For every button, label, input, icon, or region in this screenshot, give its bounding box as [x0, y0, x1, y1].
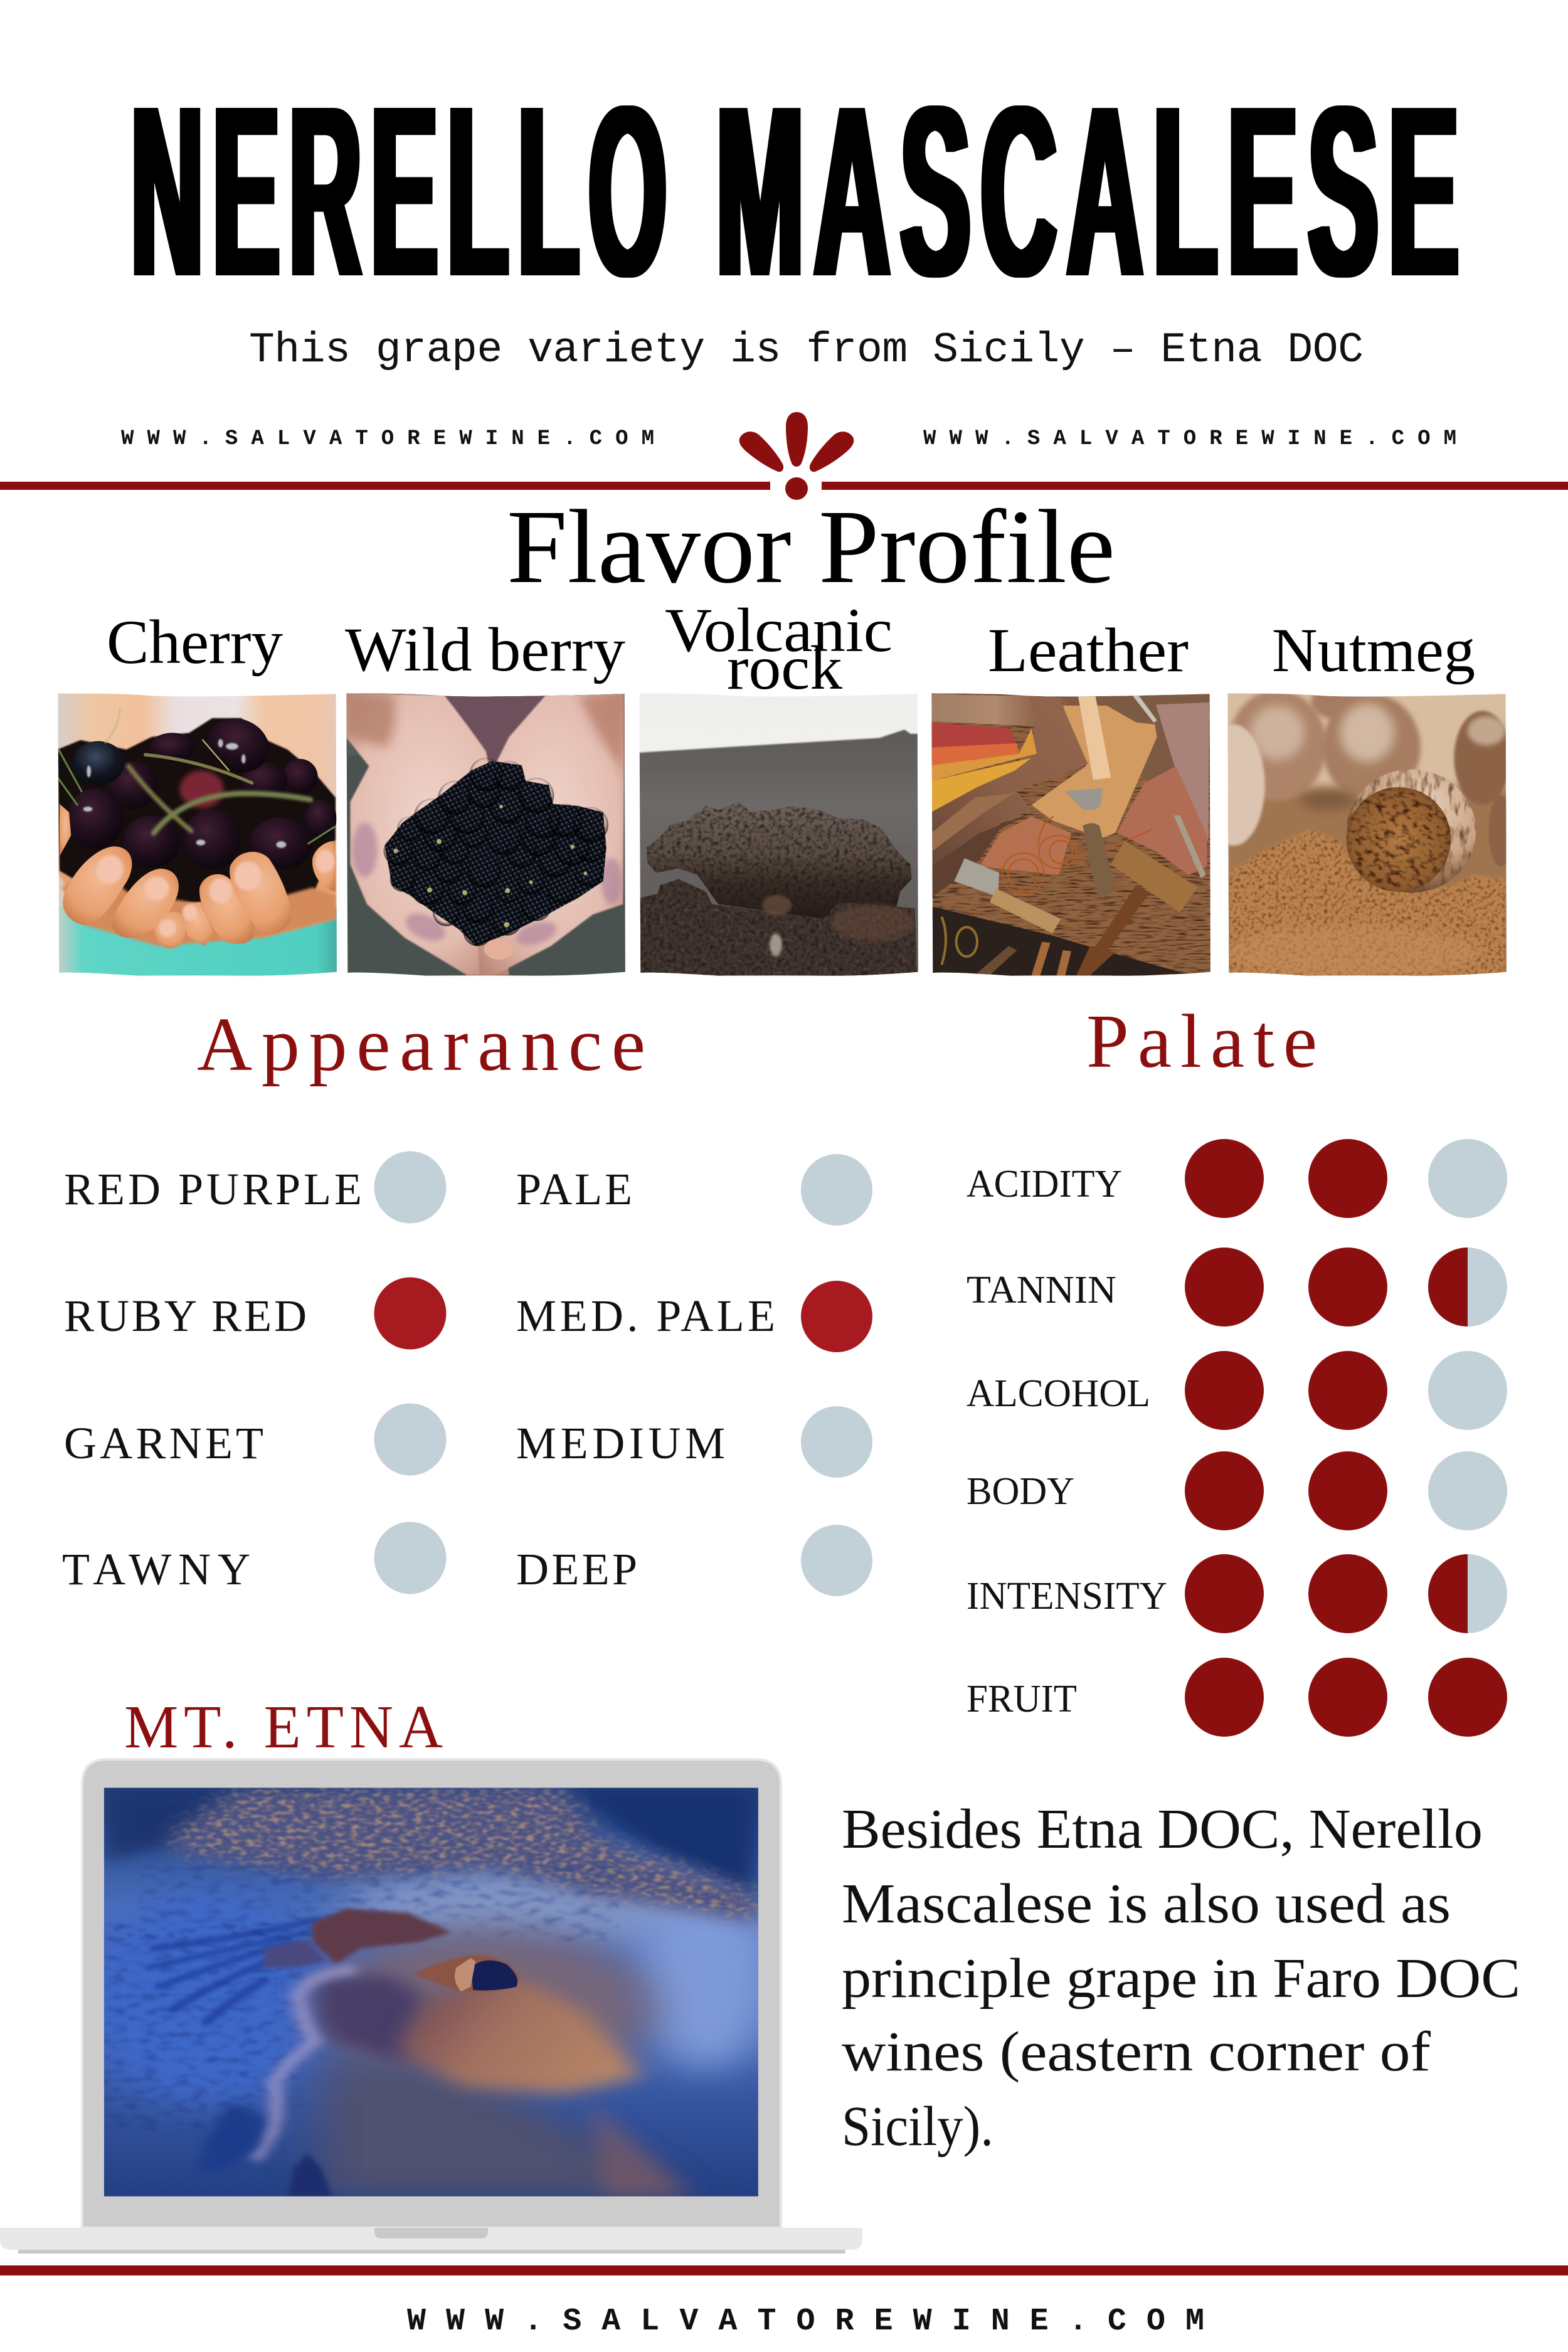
title: MASCALESE	[716, 55, 1469, 327]
flavor label: volcanic rock: Volcanic	[665, 595, 893, 665]
row: garnet: GARNET	[64, 1418, 263, 1468]
row: fruit	[967, 1658, 1507, 1737]
row: deep	[516, 1525, 872, 1596]
laptop with etna photo	[0, 1759, 862, 2254]
flavor label: nutmeg: Nutmeg	[1272, 615, 1475, 685]
body paragraph: Sicily).	[842, 2095, 993, 2158]
top divider with flower ornament	[0, 412, 1568, 500]
photo: blackberries in hands	[342, 687, 635, 980]
heading: appearance: Appearance	[197, 1002, 645, 1087]
row: ruby red	[64, 1277, 447, 1350]
website url right: WWW.SALVATOREWINE.COM	[923, 427, 1456, 451]
appearance hue column	[62, 1152, 447, 1594]
row: tawny: TAWNY	[62, 1544, 250, 1594]
photo: mount etna from above	[82, 1788, 778, 2196]
body paragraph: Mascalese is also used as	[842, 1873, 1451, 1935]
laptop body	[82, 1759, 781, 2228]
row: intensity: INTENSITY	[967, 1575, 1167, 1618]
title: NERELLO	[131, 55, 676, 327]
heading: flavor profile: Flavor Profile	[507, 489, 1115, 605]
flavor label: volcanic rock	[665, 595, 893, 702]
row: body	[967, 1451, 1507, 1530]
row: medium pale: MED. PALE	[516, 1291, 775, 1341]
row: pale: PALE	[516, 1164, 632, 1214]
heading: palate: Palate	[1086, 999, 1317, 1084]
body paragraph: wines (eastern corner of	[842, 2021, 1431, 2083]
row: medium: MEDIUM	[516, 1418, 725, 1468]
row: acidity	[967, 1139, 1507, 1218]
row: body: BODY	[967, 1470, 1074, 1513]
bottom divider	[0, 2265, 1568, 2275]
body paragraph: Besides Etna DOC, Nerello	[842, 1798, 1483, 1860]
photo: nutmeg and powder	[1227, 694, 1507, 976]
row: tannin: TANNIN	[967, 1269, 1116, 1311]
laptop base	[0, 2228, 862, 2254]
flavor label: volcanic rock: rock	[727, 633, 842, 702]
row: medium pale	[516, 1281, 872, 1352]
flavor label: leather: Leather	[988, 615, 1189, 685]
row: alcohol	[967, 1351, 1507, 1430]
body paragraph	[842, 1798, 1520, 2158]
title	[131, 55, 1469, 327]
row: ruby red: RUBY RED	[64, 1291, 307, 1341]
website url left: WWW.SALVATOREWINE.COM	[121, 427, 654, 451]
row: tawny	[62, 1522, 447, 1594]
subtitle: This grape variety is from Sicily – Etna DOC	[249, 326, 1364, 374]
row: acidity: ACIDITY	[967, 1163, 1122, 1205]
heading: mt. etna: MT. ETNA	[124, 1693, 443, 1761]
row: pale	[516, 1154, 872, 1226]
flavor label: cherry: Cherry	[107, 607, 283, 677]
row: intensity	[967, 1554, 1507, 1633]
photo: cherries in hands	[53, 687, 346, 980]
row: medium	[516, 1406, 872, 1478]
row: tannin	[967, 1248, 1507, 1327]
photo: volcanic rock	[635, 687, 928, 980]
row: red purple	[64, 1152, 447, 1223]
body paragraph: principle grape in Faro DOC	[842, 1947, 1520, 2010]
photo: leather and tools	[927, 687, 1220, 980]
row: deep: DEEP	[516, 1544, 637, 1594]
website url bottom: WWW.SALVATOREWINE.COM	[407, 2304, 1204, 2339]
row: red purple: RED PURPLE	[64, 1164, 362, 1214]
palate scale	[967, 1139, 1507, 1737]
row: fruit: FRUIT	[967, 1678, 1077, 1720]
appearance depth column	[516, 1154, 872, 1596]
row: alcohol: ALCOHOL	[967, 1372, 1150, 1415]
row: garnet	[64, 1404, 447, 1475]
flavor label: wild berry: Wild berry	[345, 615, 625, 684]
